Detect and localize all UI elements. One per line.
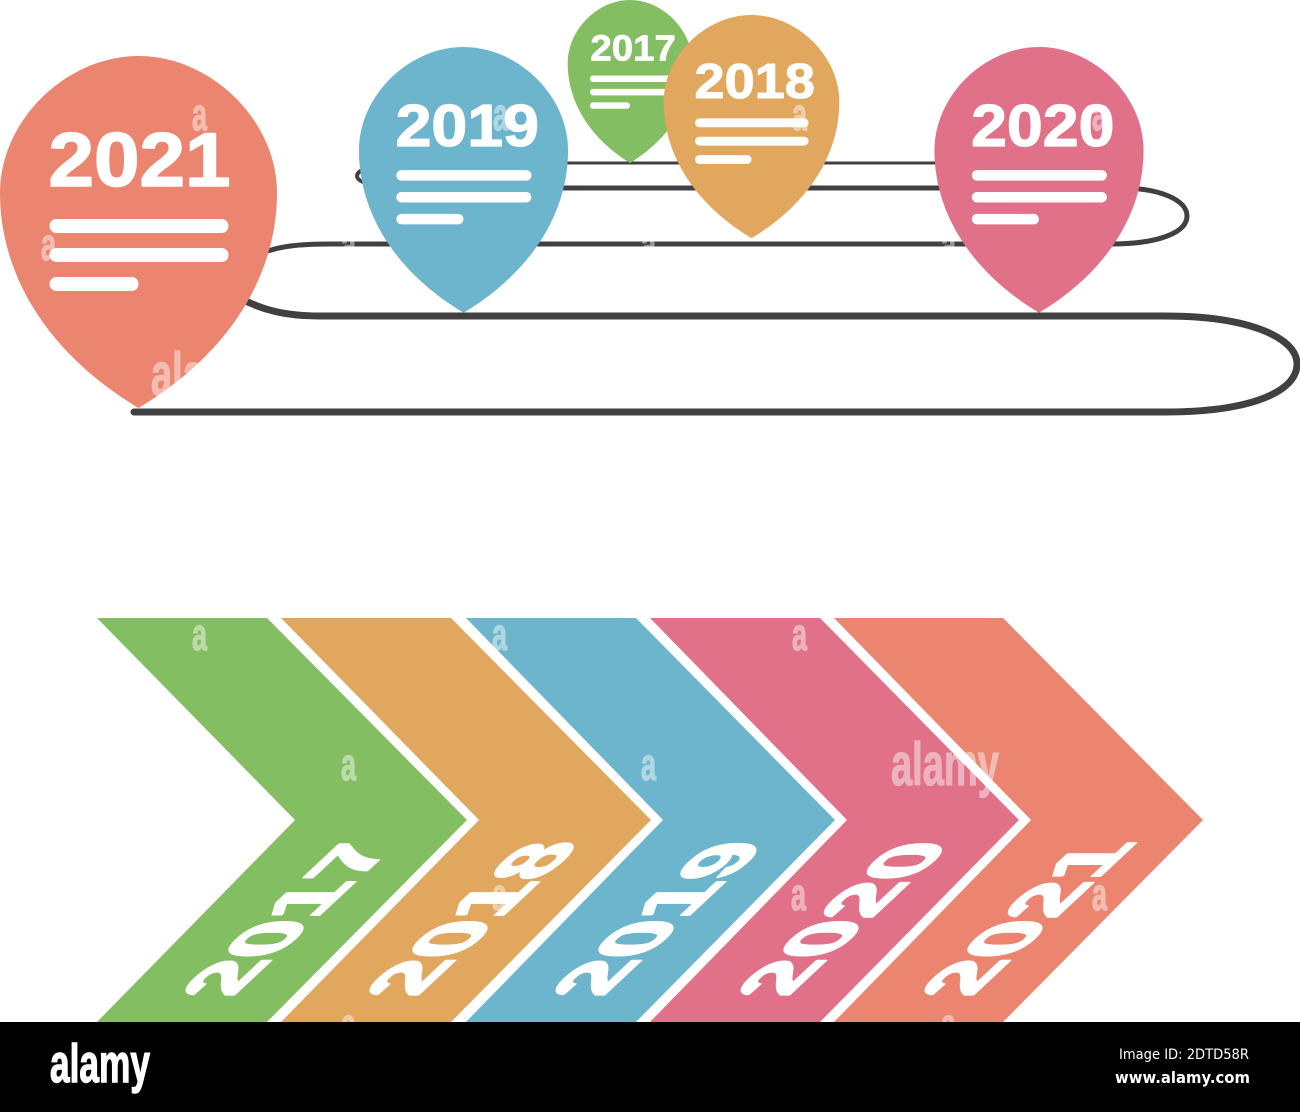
footer bar: Image ID: 2DTD58R: [1119, 1047, 1249, 1063]
chevron: 2018: 2018: [342, 841, 600, 997]
watermarks: a: [641, 219, 657, 270]
watermarks: a: [493, 89, 509, 140]
watermarks: a: [791, 869, 807, 920]
pin: 2020: 2020: [971, 94, 1115, 159]
pin: 2019: [359, 47, 568, 313]
watermarks: a: [941, 219, 957, 270]
watermarks: a: [341, 999, 357, 1050]
watermarks: a: [792, 609, 808, 660]
chevron: 2021: [834, 618, 1203, 1022]
watermarks: a: [792, 89, 808, 140]
pin: 2017: [568, 0, 692, 163]
footer bar: [0, 1022, 1300, 1112]
watermarks: a: [41, 219, 57, 270]
watermarks: a: [641, 739, 657, 790]
footer bar: alamy: [50, 1034, 150, 1094]
pin: 2017: 2017: [590, 28, 676, 69]
chevron: 2017: 2017: [158, 841, 416, 997]
chevron: 2019: 2019: [528, 841, 786, 997]
winding timeline road: [134, 163, 1297, 412]
watermarks: [41, 89, 1108, 1050]
watermarks: a: [192, 609, 208, 660]
watermarks: a: [492, 609, 508, 660]
chevron: 2019: [466, 618, 835, 1022]
chevron: 2021: 2021: [897, 841, 1155, 997]
watermarks: alamy: [151, 341, 259, 408]
watermarks: a: [192, 89, 208, 140]
footer bar: www.alamy.com: [1115, 1068, 1250, 1087]
pin: 2021: 2021: [48, 118, 230, 203]
watermarks: a: [1092, 89, 1108, 140]
pin: 2021: [0, 56, 277, 408]
watermarks: a: [941, 999, 957, 1050]
watermarks: a: [492, 869, 508, 920]
watermarks: a: [1092, 869, 1108, 920]
chevron: 2018: [281, 618, 651, 1022]
chevron: 2020: [650, 618, 1019, 1022]
watermarks: a: [341, 219, 357, 270]
pin: 2019: 2019: [396, 94, 539, 159]
chevron: 2020: 2020: [713, 841, 971, 997]
chevron: 2017: [97, 618, 467, 1022]
pin: 2018: [664, 15, 839, 238]
pin: 2020: [934, 47, 1144, 313]
pin: 2018: 2018: [694, 54, 815, 109]
watermarks: alamy: [891, 731, 999, 798]
watermarks: a: [341, 739, 357, 790]
